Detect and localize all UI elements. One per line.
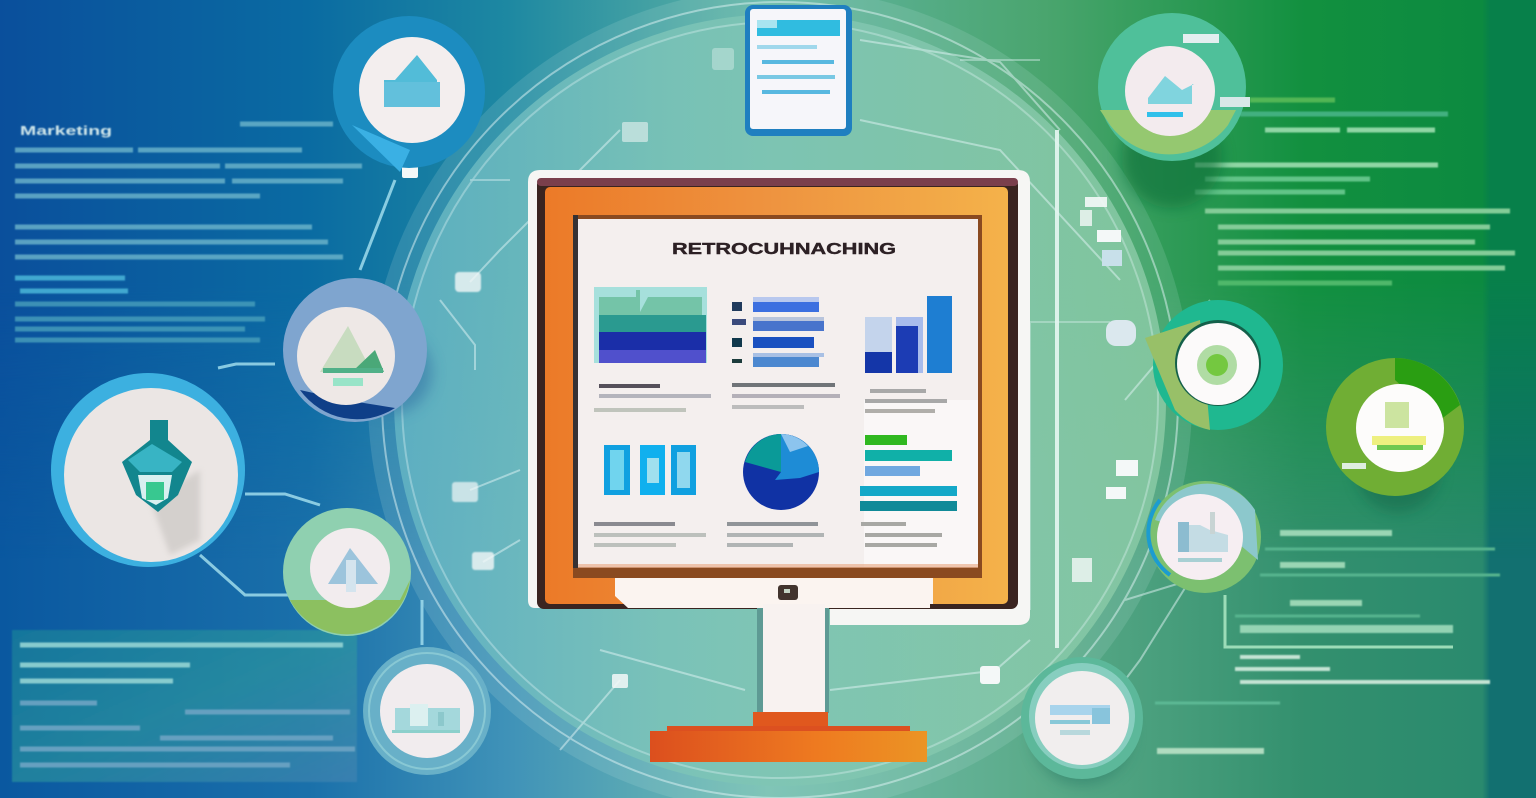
chin xyxy=(615,578,933,608)
monitor stand xyxy=(757,604,829,714)
panel lines xyxy=(20,645,343,681)
chart: horizontal bars xyxy=(860,435,957,547)
connector lines xyxy=(200,180,422,645)
building glyph xyxy=(395,708,460,730)
screen xyxy=(578,219,978,567)
chart: column icons xyxy=(594,445,706,547)
dark frame xyxy=(537,178,1018,609)
central ring network xyxy=(368,0,1210,798)
icon: far-right badge xyxy=(1326,358,1464,512)
pedestal glyph xyxy=(1385,402,1409,428)
orange frame xyxy=(545,187,1008,604)
icon: lower-left tree badge xyxy=(283,508,411,636)
icon: mid-left landscape badge xyxy=(283,278,432,422)
outer white bezel xyxy=(528,170,1030,625)
text block: upper right xyxy=(1195,100,1515,283)
shield glyph xyxy=(122,420,192,512)
house glyph xyxy=(384,55,437,107)
subheading xyxy=(15,278,128,291)
camera xyxy=(778,585,798,600)
title: RETROCUHNACHING xyxy=(672,241,896,258)
icon: right gear badge xyxy=(1145,300,1283,430)
heading: Marketing xyxy=(20,123,112,138)
document icon xyxy=(745,5,852,136)
icon: top-left house badge xyxy=(333,16,485,172)
body lines xyxy=(15,124,362,257)
text panel: lower left xyxy=(12,630,357,782)
icon: large shield badge xyxy=(51,373,245,567)
tree glyph xyxy=(328,548,378,584)
small node icons around the ring xyxy=(402,48,1138,688)
monitor base xyxy=(650,712,927,762)
text block: lower right xyxy=(1155,533,1500,751)
icon: bottom-right badge xyxy=(1021,657,1143,785)
chart: landscape tile xyxy=(594,287,711,412)
chart: pie xyxy=(727,434,824,547)
gear glyph xyxy=(1197,345,1237,385)
inner screen edge xyxy=(573,215,982,578)
monitor xyxy=(528,170,1030,762)
panel glyph xyxy=(1050,705,1110,715)
landscape glyph xyxy=(320,326,372,372)
icon: right lower factory badge xyxy=(1148,481,1261,593)
factory glyph xyxy=(1178,522,1189,552)
chart: bar chart xyxy=(865,296,952,413)
document lines xyxy=(757,20,840,36)
icon: bottom-left building badge xyxy=(363,647,491,775)
icon: top-right badge xyxy=(1098,13,1250,208)
text block: upper left xyxy=(15,123,362,340)
icon glyph xyxy=(1148,76,1194,104)
chart: list with bars xyxy=(732,297,840,409)
